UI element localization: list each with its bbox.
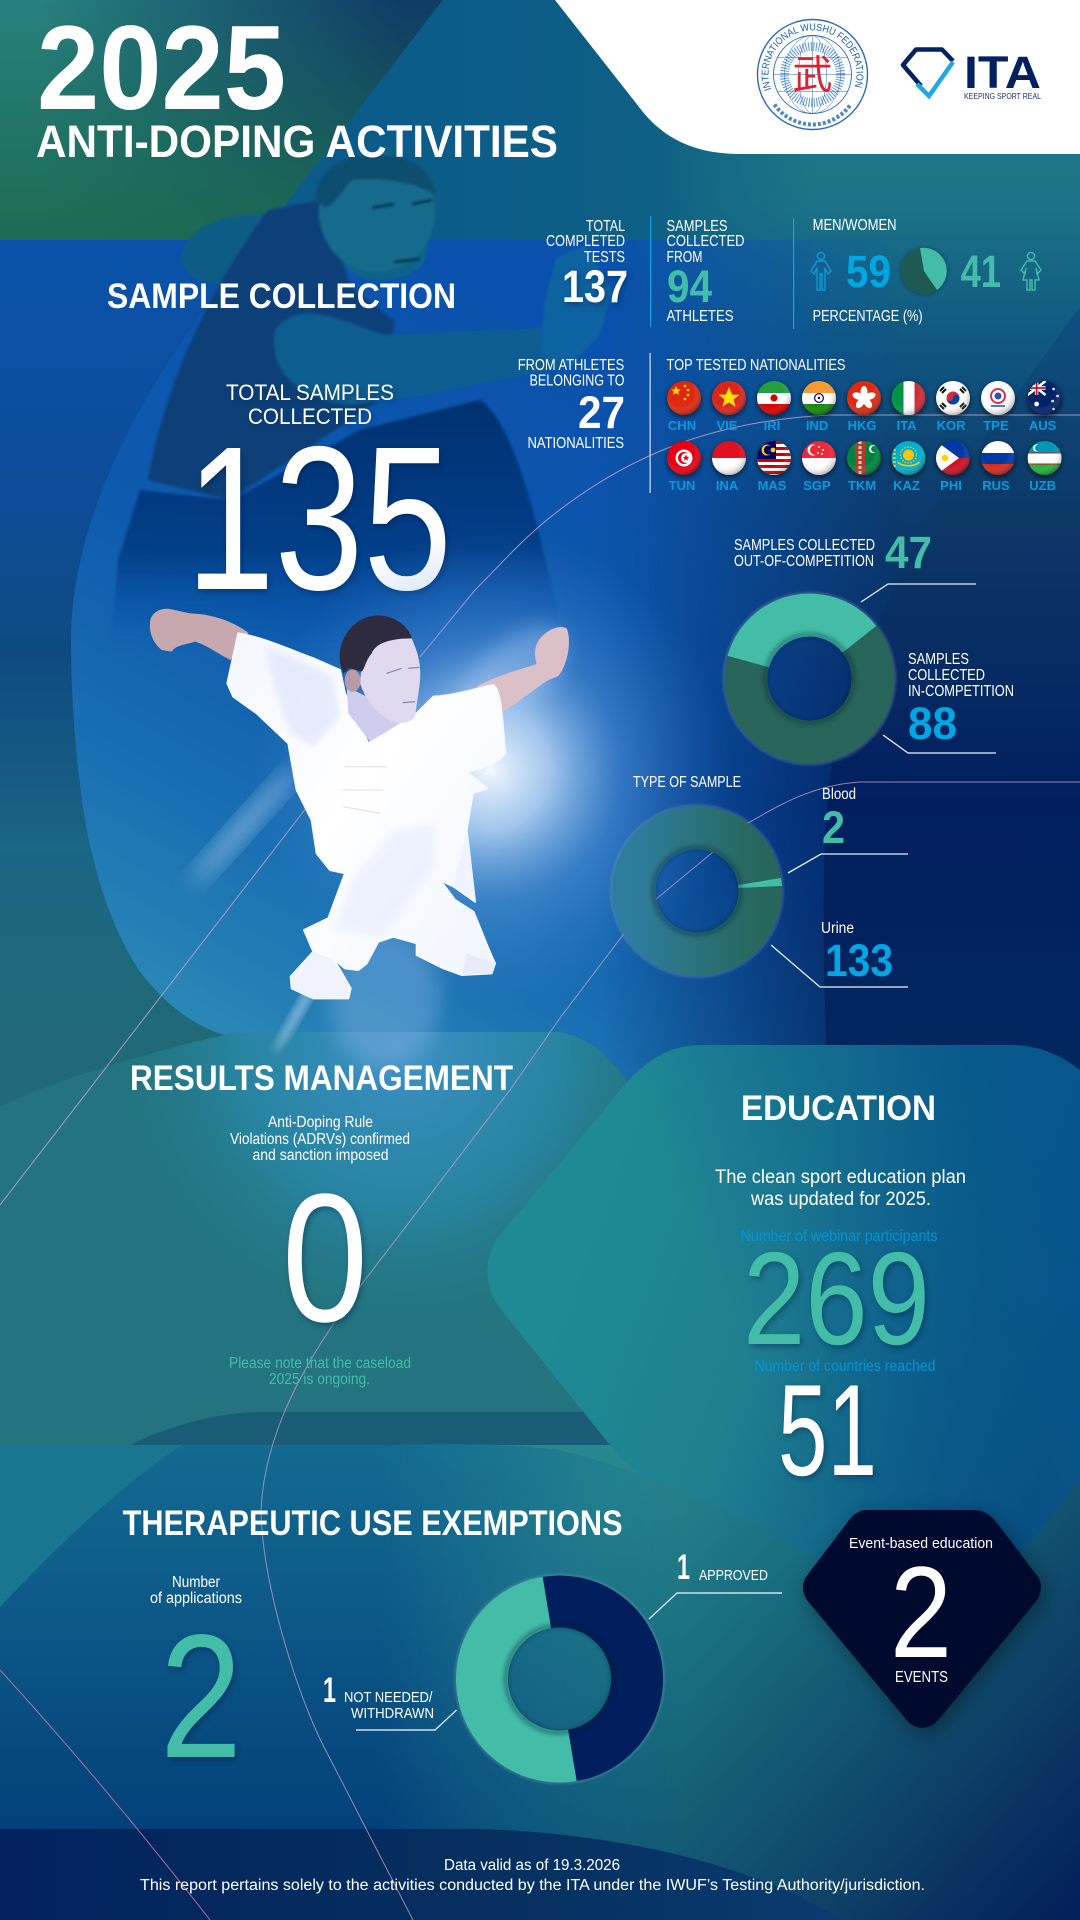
flag: KOR bbox=[935, 381, 971, 433]
flag: INA: INA bbox=[716, 478, 739, 493]
title: 2025 bbox=[37, 1, 286, 135]
neck and face bbox=[347, 687, 400, 742]
flag: ITA bbox=[890, 381, 926, 433]
donut: type of sample bbox=[612, 806, 782, 976]
total completed tests bbox=[546, 218, 628, 312]
samples from athletes bbox=[650, 216, 744, 327]
title: ANTI-DOPING ACTIVITIES bbox=[36, 116, 558, 167]
heading: type of sample: TYPE OF SAMPLE bbox=[633, 774, 741, 791]
flag: IRI bbox=[756, 381, 792, 433]
donut: tue outcomes bbox=[456, 1575, 664, 1783]
callout: in-competition: SAMPLES bbox=[908, 651, 969, 668]
callout: not needed / withdrawn: WITHDRAWN bbox=[351, 1705, 434, 1722]
total samples collected: 135 bbox=[186, 404, 452, 633]
flag: TUN bbox=[666, 441, 702, 493]
total samples collected: TOTAL SAMPLES bbox=[226, 380, 394, 405]
logo: ITA: KEEPING SPORT REAL bbox=[964, 92, 1041, 101]
flag: TUN: TUN bbox=[669, 478, 695, 493]
big number: 0 bbox=[282, 1155, 368, 1360]
flag: MAS bbox=[756, 441, 792, 493]
flag: ITA: ITA bbox=[897, 418, 917, 433]
flag: PHI: PHI bbox=[940, 478, 962, 493]
flag: IRI: IRI bbox=[764, 418, 780, 433]
logo: ITA bbox=[903, 47, 1041, 101]
ear bbox=[345, 669, 361, 692]
men/women: 41 bbox=[961, 246, 1001, 297]
callout: urine: 133 bbox=[825, 935, 893, 986]
callout: in-competition bbox=[883, 651, 1014, 753]
webinar participants: Number of webinar participants bbox=[740, 1228, 938, 1245]
countries reached: Number of countries reached bbox=[754, 1358, 936, 1375]
callout: blood bbox=[788, 786, 908, 873]
heading: RESULTS MANAGEMENT bbox=[130, 1059, 513, 1098]
flag: TKM bbox=[846, 441, 882, 493]
samples from athletes: FROM bbox=[666, 249, 702, 266]
glow and light beams behind figure bbox=[186, 530, 730, 1070]
footer note: This report pertains solely to the activities conducted by the ITA under the IWUF’s Testing Authority/jurisdiction. bbox=[140, 1877, 925, 1894]
description: Anti-Doping Rule bbox=[268, 1114, 373, 1131]
panel: event-based education: 2 bbox=[890, 1539, 952, 1685]
samples from athletes: ATHLETES bbox=[666, 308, 734, 325]
flag: AUS bbox=[1027, 381, 1063, 433]
flag: RUS bbox=[980, 441, 1016, 493]
panel: top tested nationalities bbox=[666, 357, 1063, 493]
description: The clean sport education plan bbox=[715, 1166, 966, 1188]
men/women: 59 bbox=[846, 246, 891, 297]
note: Please note that the caseload bbox=[229, 1355, 411, 1372]
description bbox=[715, 1166, 966, 1210]
note bbox=[229, 1355, 411, 1388]
logo: International Wushu Federation bbox=[756, 18, 868, 130]
number of applications: Number bbox=[172, 1574, 220, 1591]
flag: TKM: TKM bbox=[848, 478, 876, 493]
background athlete photo bbox=[110, 152, 612, 650]
eyes and mouth bbox=[387, 667, 419, 703]
figure: athlete in white bbox=[150, 609, 569, 998]
callout: approved: 1 bbox=[677, 1548, 690, 1587]
nationalities count: NATIONALITIES bbox=[528, 435, 624, 452]
description: was updated for 2025. bbox=[750, 1188, 931, 1210]
flag: VIE bbox=[711, 381, 747, 433]
flag: RUS: RUS bbox=[982, 478, 1010, 493]
logo: International Wushu Federation: INTERNATIONAL WUSHU FEDERATION bbox=[762, 24, 864, 91]
callout: out-of-competition: SAMPLES COLLECTED bbox=[734, 537, 875, 554]
callout: approved bbox=[649, 1548, 782, 1619]
donut: out-of-competition vs in-competition bbox=[724, 593, 895, 764]
panel: event-based education bbox=[803, 1510, 1045, 1734]
callout: urine bbox=[771, 920, 908, 987]
callout: blood: 2 bbox=[822, 802, 845, 853]
callout: in-competition: IN-COMPETITION bbox=[908, 683, 1014, 700]
icon: woman bbox=[1021, 252, 1041, 290]
flag: KAZ bbox=[890, 441, 926, 493]
flag: UZB bbox=[1027, 441, 1063, 493]
men/women bbox=[793, 217, 1041, 329]
flag: CHN bbox=[666, 381, 702, 433]
footer note bbox=[140, 1857, 925, 1894]
flag: KAZ: KAZ bbox=[893, 478, 920, 493]
icon: man bbox=[811, 252, 831, 290]
samples from athletes: COLLECTED bbox=[666, 233, 744, 250]
pink curved line: right to bottom bbox=[261, 782, 1080, 1920]
flag: HKG: HKG bbox=[848, 418, 876, 433]
flag: IND: IND bbox=[806, 418, 828, 433]
callout: not needed / withdrawn: 1 bbox=[323, 1671, 336, 1710]
flag: CHN: CHN bbox=[668, 418, 696, 433]
callout: out-of-competition bbox=[734, 527, 976, 602]
pink line: bottom left bbox=[0, 1670, 210, 1920]
title bbox=[36, 1, 558, 167]
panel: top tested nationalities: TOP TESTED NATIONALITIES bbox=[666, 357, 846, 374]
flag: MAS: MAS bbox=[758, 478, 787, 493]
men/women: PERCENTAGE (%) bbox=[813, 308, 923, 325]
description bbox=[230, 1114, 410, 1164]
nationalities count: 27 bbox=[578, 387, 625, 438]
logo: ITA: ITA bbox=[964, 47, 1041, 98]
flag: INA bbox=[711, 441, 747, 493]
total completed tests: TOTAL bbox=[586, 218, 625, 235]
total completed tests: TESTS bbox=[584, 249, 625, 266]
flag: SGP: SGP bbox=[803, 478, 831, 493]
pie: men women bbox=[900, 248, 948, 294]
pink curved line: top right to far left bbox=[0, 415, 1080, 1205]
flag: UZB: UZB bbox=[1029, 478, 1056, 493]
webinar participants: 269 bbox=[743, 1225, 930, 1372]
panel: event-based education: EVENTS bbox=[895, 1669, 948, 1686]
left arm and hand bbox=[150, 609, 248, 660]
footer note: Data valid as of 19.3.2026 bbox=[444, 1857, 620, 1874]
shoes bbox=[291, 952, 351, 998]
heading: sample collection: SAMPLE COLLECTION bbox=[107, 277, 456, 316]
logo: International Wushu Federation: 武 bbox=[792, 42, 832, 100]
callout: not needed / withdrawn bbox=[323, 1671, 457, 1730]
hair bbox=[340, 615, 412, 673]
callout: approved: APPROVED bbox=[699, 1567, 768, 1584]
callout: in-competition: 88 bbox=[908, 698, 957, 749]
flag: IND bbox=[801, 381, 837, 433]
countries reached: 51 bbox=[778, 1357, 877, 1503]
nationalities count: BELONGING TO bbox=[530, 373, 624, 390]
callout: out-of-competition: 47 bbox=[885, 527, 932, 578]
total samples collected: COLLECTED bbox=[248, 404, 372, 429]
callout: blood: Blood bbox=[822, 786, 856, 803]
right arm and hand bbox=[477, 627, 569, 712]
flag: AUS: AUS bbox=[1029, 418, 1057, 433]
flag: KOR: KOR bbox=[937, 418, 966, 433]
samples from athletes: SAMPLES bbox=[666, 218, 728, 235]
white header shape bbox=[555, 0, 1080, 154]
panel: education bbox=[715, 1089, 966, 1503]
flag: VIE: VIE bbox=[717, 418, 738, 433]
samples from athletes: 94 bbox=[667, 261, 712, 312]
nationalities count bbox=[518, 353, 651, 493]
nationalities count: FROM ATHLETES bbox=[518, 357, 624, 374]
description: Violations (ADRVs) confirmed bbox=[230, 1131, 410, 1148]
panel: results management bbox=[130, 1059, 513, 1388]
total completed tests: 137 bbox=[562, 261, 628, 312]
flag: SGP bbox=[801, 441, 837, 493]
panel: event-based education: Event-based education bbox=[849, 1535, 993, 1552]
flag: TPE bbox=[980, 381, 1016, 433]
flag: TPE: TPE bbox=[983, 418, 1009, 433]
flag: HKG bbox=[846, 381, 882, 433]
callout: urine: Urine bbox=[821, 920, 854, 937]
number of applications: of applications bbox=[150, 1590, 242, 1607]
clothes bbox=[227, 633, 505, 998]
callout: out-of-competition: OUT-OF-COMPETITION bbox=[734, 553, 874, 570]
heading: THERAPEUTIC USE EXEMPTIONS bbox=[123, 1504, 623, 1543]
number of applications: 2 bbox=[160, 1599, 242, 1795]
men/women: MEN/WOMEN bbox=[813, 217, 897, 234]
total completed tests: COMPLETED bbox=[546, 233, 625, 250]
description: and sanction imposed bbox=[252, 1147, 388, 1164]
heading: EDUCATION bbox=[741, 1089, 936, 1128]
callout: not needed / withdrawn: NOT NEEDED/ bbox=[344, 1689, 433, 1706]
panel: therapeutic use exemptions bbox=[123, 1504, 782, 1795]
callout: in-competition: COLLECTED bbox=[908, 667, 985, 684]
number of applications bbox=[150, 1574, 242, 1795]
note: 2025 is ongoing. bbox=[269, 1371, 370, 1388]
flag: PHI bbox=[935, 441, 971, 493]
